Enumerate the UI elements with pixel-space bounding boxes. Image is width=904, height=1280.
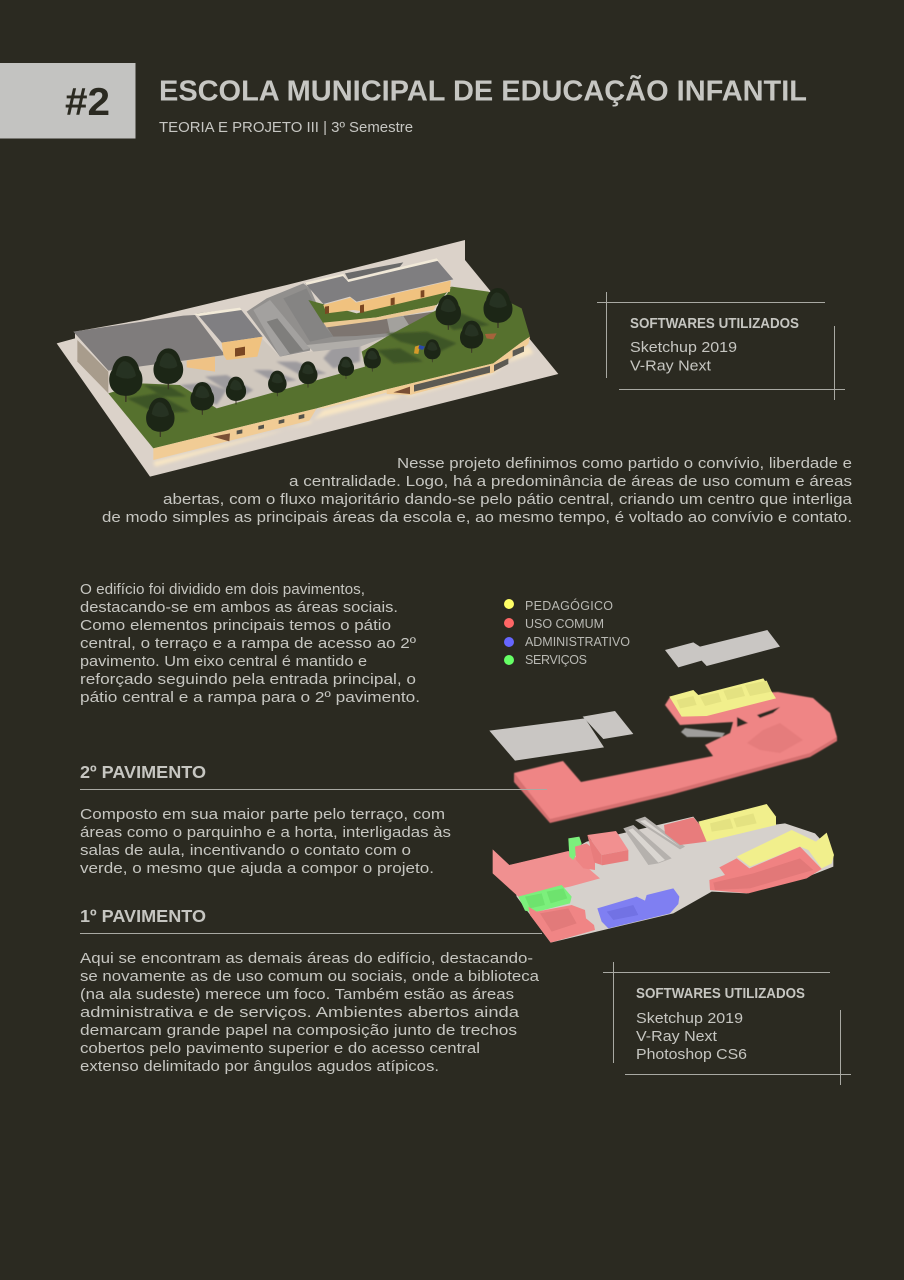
plaza shadows bbox=[180, 345, 360, 405]
title: ESCOLA MUNICIPAL DE EDUCAÇÃO INFANTIL bbox=[159, 74, 807, 108]
base plate bbox=[57, 240, 558, 477]
red SW block bbox=[528, 905, 595, 943]
main roof left bbox=[73, 315, 225, 371]
service bbox=[568, 837, 582, 860]
terrace facade: left part bbox=[153, 408, 317, 460]
legend: pedagógico: PEDAGÓGICO bbox=[525, 598, 613, 613]
left building wall bbox=[77, 340, 108, 393]
text block: 1º pavimento: cobertos pelo pavimento superior e do acesso central bbox=[80, 1040, 480, 1057]
text block: building description: central, o terraço e a rampa de acesso ao 2º bbox=[80, 635, 417, 652]
pedagogical block: second floor bbox=[669, 678, 776, 717]
legend: serviços: SERVIÇOS bbox=[525, 653, 587, 667]
intro paragraph: a centralidade. Logo, há a predominância de áreas de uso comum e áreas bbox=[289, 473, 852, 490]
text block: 1º pavimento: Aqui se encontram as demais áreas do edifício, destacando- bbox=[80, 950, 533, 967]
upper roof right bbox=[305, 260, 453, 304]
heading: 2º pavimento: 2º PAVIMENTO bbox=[80, 762, 206, 782]
legend: administrativo: ADMINISTRATIVO bbox=[525, 635, 630, 649]
software list: V-Ray Next bbox=[630, 358, 712, 374]
slab openings bbox=[737, 717, 748, 727]
text block: building description: reforçado seguindo pela entrada principal, o bbox=[80, 671, 416, 688]
east pedagogical bbox=[737, 830, 834, 868]
ramps and courtyard bbox=[247, 283, 433, 357]
text block: 2º pavimento: salas de aula, incentivando o contato com o bbox=[80, 842, 411, 859]
intro paragraph bbox=[102, 455, 853, 526]
3D render: school building bbox=[57, 240, 558, 477]
terrace facade: thin middle bbox=[317, 389, 387, 408]
software list: Sketchup 2019 bbox=[630, 339, 737, 356]
text block: 1º pavimento: demarcam grande papel na composição junto de trechos bbox=[80, 1022, 517, 1039]
exploded diagram: second floor slab bbox=[514, 692, 837, 823]
header: number box: #2 bbox=[65, 81, 110, 124]
heading: softwares: SOFTWARES UTILIZADOS bbox=[630, 316, 799, 332]
floor slab bbox=[510, 817, 833, 943]
facade openings bbox=[393, 387, 410, 394]
software box 2 bbox=[603, 962, 851, 1085]
red west area bbox=[493, 849, 600, 897]
exploded diagram: ground floor bbox=[493, 804, 834, 943]
text block: building description: pátio central e a rampa para o 2º pavimento. bbox=[80, 689, 420, 706]
text block: 1º pavimento: (na ala sudeste) merece um foco. Também estão as áreas bbox=[80, 986, 514, 1003]
intro paragraph: abertas, com o fluxo majoritário dando-se pelo pátio central, criando um centro que interliga bbox=[163, 491, 853, 508]
text block: 2º pavimento bbox=[80, 806, 451, 877]
legend bbox=[504, 598, 630, 667]
software list: Photoshop CS6 bbox=[636, 1046, 747, 1063]
intro paragraph: Nesse projeto definimos como partido o convívio, liberdade e bbox=[397, 455, 852, 472]
text block: 1º pavimento: se novamente as de uso comum ou sociais, onde a biblioteca bbox=[80, 968, 540, 985]
playground bbox=[414, 345, 420, 354]
terrace details bbox=[747, 723, 803, 753]
text block: 2º pavimento: Composto em sua maior parte pelo terraço, com bbox=[80, 806, 445, 823]
green terrace bbox=[108, 287, 530, 448]
text block: 1º pavimento: administrativa e de serviços. Ambientes abertos ainda bbox=[80, 1004, 520, 1021]
text block: building description bbox=[80, 581, 420, 706]
text block: 2º pavimento: áreas como o parquinho e a horta, interligadas às bbox=[80, 824, 451, 841]
tree shadows bbox=[127, 310, 490, 413]
heading: 1º pavimento: 1º PAVIMENTO bbox=[80, 906, 206, 926]
upper green roof edge bbox=[308, 287, 452, 323]
software box 1 bbox=[597, 292, 845, 400]
subtitle: TEORIA E PROJETO III | 3º Semestre bbox=[159, 120, 413, 136]
software list: Sketchup 2019 bbox=[636, 1010, 743, 1027]
east red bbox=[709, 847, 822, 893]
ramps bbox=[623, 825, 672, 865]
header: number box bbox=[0, 63, 136, 138]
north red block bbox=[664, 817, 707, 845]
text block: building description: destacando-se em ambos as áreas sociais. bbox=[80, 599, 398, 616]
terrace facade: right part bbox=[387, 337, 530, 395]
plaza bbox=[108, 337, 387, 408]
admin bbox=[597, 888, 679, 928]
ramp bbox=[681, 728, 725, 737]
text block: building description: Como elementos principais temos o pátio bbox=[80, 617, 391, 634]
text block: 2º pavimento: verde, o mesmo que ajuda a compor o projeto. bbox=[80, 860, 434, 877]
small red bbox=[575, 843, 595, 870]
north pedagogical bbox=[698, 804, 776, 842]
text block: 1º pavimento bbox=[80, 950, 540, 1075]
software list bbox=[630, 339, 737, 374]
text block: 1º pavimento: extenso delimitado por ângulos agudos atípicos. bbox=[80, 1058, 439, 1075]
text block: building description: O edifício foi dividido em dois pavimentos, bbox=[80, 581, 365, 598]
heading: softwares: SOFTWARES UTILIZADOS bbox=[636, 986, 805, 1002]
trees bbox=[109, 288, 512, 437]
software list: V-Ray Next bbox=[636, 1028, 718, 1045]
text block: building description: pavimento. Um eixo central é mantido e bbox=[80, 653, 367, 670]
intro paragraph: de modo simples as principais áreas da escola e, ao mesmo tempo, é voltado ao convívio e contato. bbox=[102, 509, 852, 526]
software list bbox=[636, 1010, 747, 1063]
exploded diagram: roof slabs bbox=[489, 630, 780, 761]
legend: uso comum: USO COMUM bbox=[525, 617, 604, 631]
